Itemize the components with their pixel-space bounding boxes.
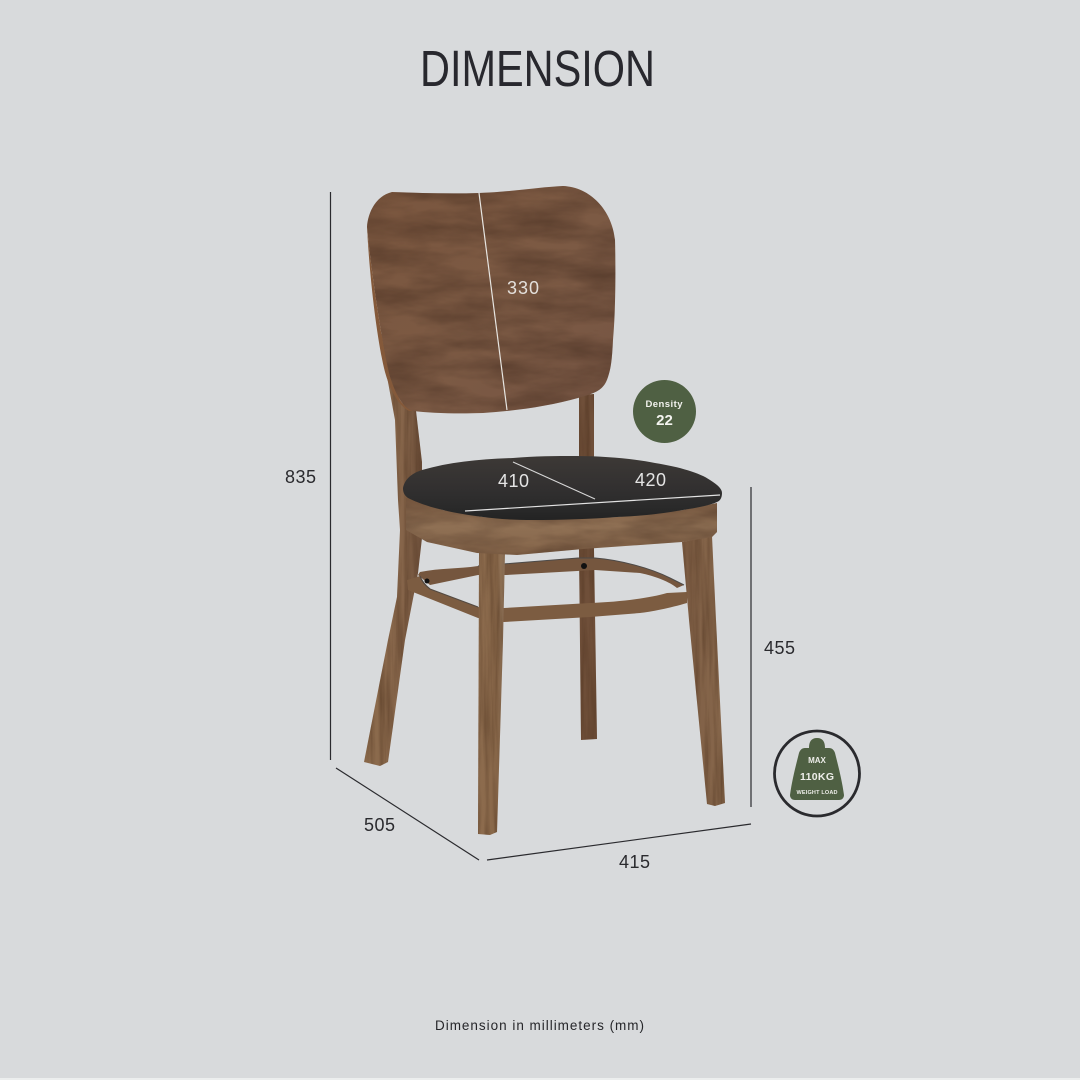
seat cushion [403, 456, 722, 520]
dimension line: total height [330, 192, 332, 760]
badge: weight load: 110KG [800, 771, 834, 783]
badge: density: 22 [656, 412, 673, 429]
seat width line [465, 495, 720, 511]
badge: density: Density [646, 399, 683, 410]
backrest depth line [479, 193, 507, 410]
left rear post and leg [364, 333, 422, 766]
front left leg [478, 553, 505, 835]
seat depth line [513, 462, 595, 499]
badge: density [633, 380, 696, 443]
badge: weight load [774, 731, 860, 816]
dimension line: width [487, 824, 751, 860]
seat frame [406, 498, 717, 555]
backrest [367, 186, 615, 413]
label: width 415: 415 [619, 852, 650, 872]
label: total height 835: 835 [285, 467, 316, 487]
badge: weight load: MAX [808, 756, 827, 765]
title: DIMENSION [420, 40, 655, 97]
label: seat height 455: 455 [764, 638, 795, 658]
icon: weight [790, 738, 844, 800]
footnote: Dimension in millimeters (mm) [435, 1018, 644, 1033]
label: backrest height 330: 330 [507, 278, 539, 298]
dimension line: depth [336, 768, 479, 860]
chair illustration [364, 186, 725, 835]
footrest ring [407, 576, 687, 622]
label: seat width 420: 420 [635, 470, 666, 490]
backrest edge [367, 227, 413, 411]
back right leg [579, 394, 597, 740]
rear stretcher ring [418, 558, 684, 588]
bottom edge [0, 1078, 1080, 1080]
label: seat depth 410: 410 [498, 471, 529, 491]
stretcher bolts [424, 563, 587, 584]
front right leg [682, 536, 725, 806]
label: depth 505: 505 [364, 815, 395, 835]
badge: weight load: WEIGHT LOAD [796, 790, 838, 796]
dimension line: seat height [750, 487, 752, 807]
